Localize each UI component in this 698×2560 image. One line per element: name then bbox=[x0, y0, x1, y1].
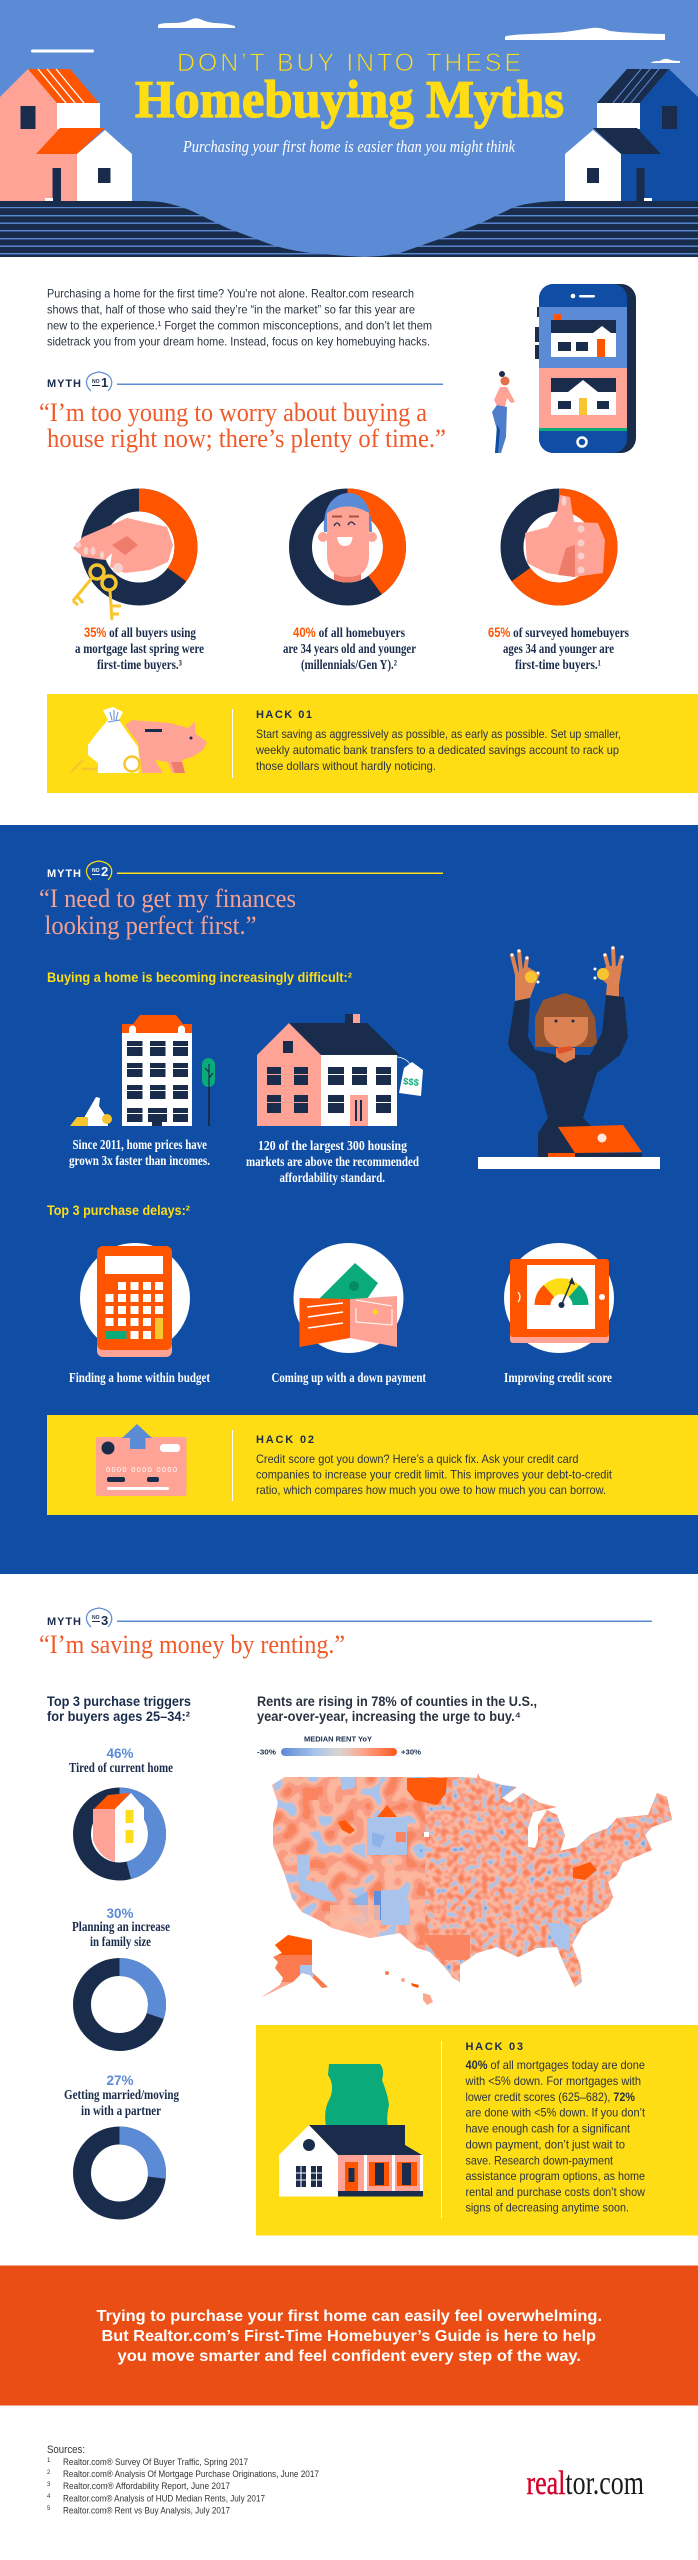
hack 02 text: Credit score got you down? Here’s a quick fix. Ask your credit card bbox=[256, 1452, 578, 1466]
sources: Realtor.com® Rent vs Buy Analysis, July 2017 bbox=[63, 2506, 230, 2516]
intro paragraph: shows that, half of those who said they’re “in the market” so far this year are bbox=[47, 302, 415, 316]
heading: rents rising: Rents are rising in 78% of counties in the U.S., bbox=[257, 1694, 537, 1709]
hack 01 label: HACK 01 bbox=[256, 709, 312, 721]
myth 1 tag: 1 bbox=[101, 375, 108, 390]
trigger 30% label: Planning an increase bbox=[72, 1919, 170, 1934]
illustration: house with price tag bbox=[257, 1014, 423, 1126]
sources: 3 bbox=[47, 2482, 51, 2488]
heading: purchase triggers bbox=[47, 1694, 191, 1724]
delay captions bbox=[69, 1370, 612, 1385]
myth 2 tag: MYTH bbox=[47, 868, 81, 880]
donut chart: 40% with smiling face bbox=[300, 493, 394, 594]
stat 65%: ages 34 and younger are bbox=[503, 641, 614, 656]
icon: phone with homes bbox=[535, 284, 636, 453]
myth 1 quote: “I’m too young to worry about buying a bbox=[39, 398, 427, 427]
hack 03 text: rental and purchase costs don’t show bbox=[466, 2185, 645, 2199]
delay captions: Improving credit score bbox=[504, 1370, 612, 1385]
map legend bbox=[257, 1734, 422, 1756]
heading: purchase triggers: Top 3 purchase triggers bbox=[47, 1694, 191, 1709]
myth 1 tag: NO bbox=[92, 379, 100, 385]
icon: credit card with arrow bbox=[96, 1424, 186, 1496]
myth 2 tag bbox=[47, 861, 443, 880]
caption: home prices: Since 2011, home prices have bbox=[72, 1137, 207, 1152]
sources: Sources: bbox=[47, 2444, 85, 2456]
donut chart: 30% bbox=[82, 1967, 157, 2042]
stat 40%: 40% of all homebuyers bbox=[293, 625, 405, 640]
hack 02 label: HACK 02 bbox=[256, 1434, 314, 1446]
hack 03 text: with <5% down. For mortgages with bbox=[465, 2074, 641, 2088]
stat 65% bbox=[488, 625, 629, 672]
trigger 46% label: Tired of current home bbox=[69, 1760, 173, 1775]
map legend: +30% bbox=[401, 1750, 422, 1756]
trigger 30% label bbox=[72, 1906, 170, 1949]
stat 35%: 35% of all buyers using bbox=[84, 625, 196, 640]
stat 40%: are 34 years old and younger bbox=[283, 641, 416, 656]
donut chart: 27% bbox=[82, 2136, 157, 2210]
hack 03 text: 40% of all mortgages today are done bbox=[466, 2058, 645, 2072]
stat 40%: (millennials/Gen Y).² bbox=[301, 657, 397, 672]
panel: hack 03 bbox=[256, 2025, 698, 2236]
illustration: apartment building, bag and tree bbox=[70, 1015, 215, 1126]
heading: purchase triggers: for buyers ages 25–34:² bbox=[47, 1709, 190, 1724]
heading: top 3 purchase delays: Top 3 purchase delays:² bbox=[47, 1203, 190, 1218]
intro paragraph: sidetrack you from your dream home. Instead, focus on key homebuying hacks. bbox=[47, 334, 430, 348]
caption: home prices bbox=[69, 1137, 210, 1168]
sources: Realtor.com® Affordability Report, June 2017 bbox=[63, 2481, 230, 2491]
myth 1 quote: house right now; there’s plenty of time.” bbox=[47, 424, 446, 453]
icon: tablet with credit gauge bbox=[504, 1243, 614, 1353]
myth 2 tag: 2 bbox=[101, 864, 108, 879]
icon: wallet with cash bbox=[294, 1243, 404, 1353]
sources: Realtor.com® Analysis Of Mortgage Purchase Originations, June 2017 bbox=[63, 2469, 319, 2479]
panel: hack 02 bbox=[47, 1415, 698, 1515]
stat 40% bbox=[283, 625, 416, 672]
myth 1 quote bbox=[39, 398, 446, 453]
trigger 30% label: in family size bbox=[90, 1934, 151, 1949]
hack 03 text: lower credit scores (625–682), 72% bbox=[466, 2090, 635, 2104]
hack 02 text bbox=[256, 1452, 613, 1497]
panel: call to action bbox=[0, 2266, 698, 2406]
myth 2 quote: “I need to get my finances bbox=[39, 884, 296, 913]
ground with stripes bbox=[0, 199, 698, 259]
myth 2 quote bbox=[39, 884, 296, 940]
hack 01 text: Start saving as aggressively as possible, as early as possible. Set up smaller, bbox=[256, 727, 621, 741]
myth 3 tag: 3 bbox=[101, 1613, 108, 1628]
trigger 30% label: 30% bbox=[106, 1906, 134, 1921]
myth 3 tag bbox=[47, 1608, 652, 1628]
hack 02 text: companies to increase your credit limit. This improves your debt-to-credit bbox=[256, 1468, 613, 1482]
delay captions: Finding a home within budget bbox=[69, 1370, 210, 1385]
clouds bbox=[31, 18, 680, 63]
hack 03 text bbox=[465, 2058, 646, 2214]
heading: buying a home is difficult: Buying a home is becoming increasingly difficult:² bbox=[47, 970, 352, 985]
sources bbox=[47, 2444, 319, 2516]
illustration: woman with coins at desk bbox=[478, 946, 660, 1169]
map legend: MEDIAN RENT YoY bbox=[304, 1734, 372, 1744]
trigger 27% label: Getting married/moving bbox=[64, 2087, 179, 2102]
icon: credit card with arrow: 0000 0000 0000 bbox=[106, 1465, 177, 1474]
donut chart: 46% with house bbox=[82, 1793, 157, 1872]
myth 2 quote: looking perfect first.” bbox=[44, 911, 256, 940]
hack 03 text: are done with <5% down. If you don’t bbox=[466, 2106, 646, 2120]
icon: house with cash bbox=[279, 2064, 423, 2196]
subtitle: Purchasing your first home is easier than you might think bbox=[182, 137, 515, 156]
hack 03 text: signs of decreasing anytime soon. bbox=[466, 2200, 629, 2214]
icon: calculator bbox=[80, 1243, 190, 1357]
myth 2 tag: NO bbox=[92, 868, 100, 874]
stat 35% bbox=[75, 625, 204, 672]
logo: realtor.com: realtor.com bbox=[526, 2465, 644, 2502]
sources: Realtor.com® Analysis of HUD Median Rents, July 2017 bbox=[63, 2494, 265, 2504]
stat 35%: first-time buyers.³ bbox=[97, 657, 182, 672]
trigger 46% label bbox=[69, 1746, 173, 1775]
sources: 5 bbox=[47, 2506, 51, 2512]
hack 01 text bbox=[255, 727, 621, 773]
panel: call to action: you move smarter and feel confident every step of the way. bbox=[118, 2348, 581, 2365]
sources: 2 bbox=[47, 2470, 51, 2476]
panel: myth 2 background bbox=[0, 825, 698, 1574]
heading: rents rising bbox=[257, 1694, 537, 1724]
intro paragraph: Purchasing a home for the first time? You’re not alone. Realtor.com research bbox=[47, 286, 414, 300]
stat 65%: 65% of surveyed homebuyers bbox=[488, 625, 629, 640]
map legend: -30% bbox=[257, 1750, 277, 1756]
title eyebrow: DON’T BUY INTO THESE bbox=[177, 49, 521, 77]
panel: hero header bbox=[0, 0, 698, 259]
right houses bbox=[565, 69, 698, 201]
caption: housing markets: 120 of the largest 300 housing bbox=[258, 1138, 407, 1153]
myth 3 tag: MYTH bbox=[47, 1616, 81, 1628]
caption: housing markets: affordability standard. bbox=[280, 1170, 385, 1185]
map: median rent change by county bbox=[260, 1770, 680, 2005]
map inset: Hawaii bbox=[385, 1971, 433, 2005]
donut chart: 65% with thumbs up bbox=[512, 495, 606, 594]
panel: hack 01 bbox=[47, 694, 698, 793]
trigger 27% label: 27% bbox=[106, 2073, 134, 2088]
hack 03 text: assistance program options, as home bbox=[466, 2169, 645, 2183]
panel: call to action: Trying to purchase your first home can easily feel overwhelming. bbox=[96, 2308, 602, 2325]
myth 3 tag: NO bbox=[92, 1615, 100, 1621]
hack 03 text: down payment, don’t just wait to bbox=[466, 2138, 625, 2152]
hack 01 text: those dollars without hardly noticing. bbox=[256, 759, 436, 773]
caption: home prices: grown 3x faster than incomes. bbox=[69, 1153, 210, 1168]
caption: housing markets: markets are above the recommended bbox=[246, 1154, 419, 1169]
trigger 27% label: in with a partner bbox=[81, 2103, 161, 2118]
myth 3 quote: “I’m saving money by renting.” bbox=[39, 1630, 345, 1659]
sources: 4 bbox=[47, 2494, 51, 2500]
trigger 27% label bbox=[64, 2073, 179, 2118]
donut chart: 35% with hand and keys bbox=[73, 500, 186, 620]
delay captions: Coming up with a down payment bbox=[272, 1370, 426, 1385]
title: Homebuying Myths bbox=[135, 71, 564, 129]
icon: money bag and piggy bank bbox=[71, 707, 207, 773]
intro paragraph bbox=[47, 286, 432, 348]
hack 03 label: HACK 03 bbox=[466, 2041, 523, 2053]
intro paragraph: new to the experience.¹ Forget the common misconceptions, and don’t let them bbox=[47, 318, 432, 332]
heading: rents rising: year-over-year, increasing the urge to buy.⁴ bbox=[257, 1709, 521, 1724]
stat 35%: a mortgage last spring were bbox=[75, 641, 204, 656]
hack 03 text: save. Research down-payment bbox=[466, 2154, 614, 2168]
myth 1 tag: MYTH bbox=[47, 378, 81, 390]
sources: Realtor.com® Survey Of Buyer Traffic, Spring 2017 bbox=[63, 2457, 248, 2467]
panel: call to action: But Realtor.com’s First-Time Homebuyer’s Guide is here to help bbox=[102, 2328, 596, 2345]
map inset: Alaska bbox=[262, 1935, 328, 1997]
hack 02 text: ratio, which compares how much you owe to how much you can borrow. bbox=[256, 1483, 606, 1497]
trigger 46% label: 46% bbox=[106, 1746, 134, 1761]
sources: 1 bbox=[47, 2458, 51, 2464]
stat captions bbox=[75, 625, 629, 672]
icon: woman looking at phone bbox=[492, 371, 515, 453]
myth 1 tag bbox=[47, 372, 443, 391]
caption: housing markets bbox=[246, 1138, 419, 1185]
hack 03 text: have enough cash for a significant bbox=[466, 2122, 631, 2136]
illustration: house with price tag: $$$ bbox=[402, 1076, 420, 1089]
hack 01 text: weekly automatic bank transfers to a dedicated savings account to rack up bbox=[255, 743, 619, 757]
left houses bbox=[0, 69, 132, 201]
stat 65%: first-time buyers.¹ bbox=[515, 657, 601, 672]
